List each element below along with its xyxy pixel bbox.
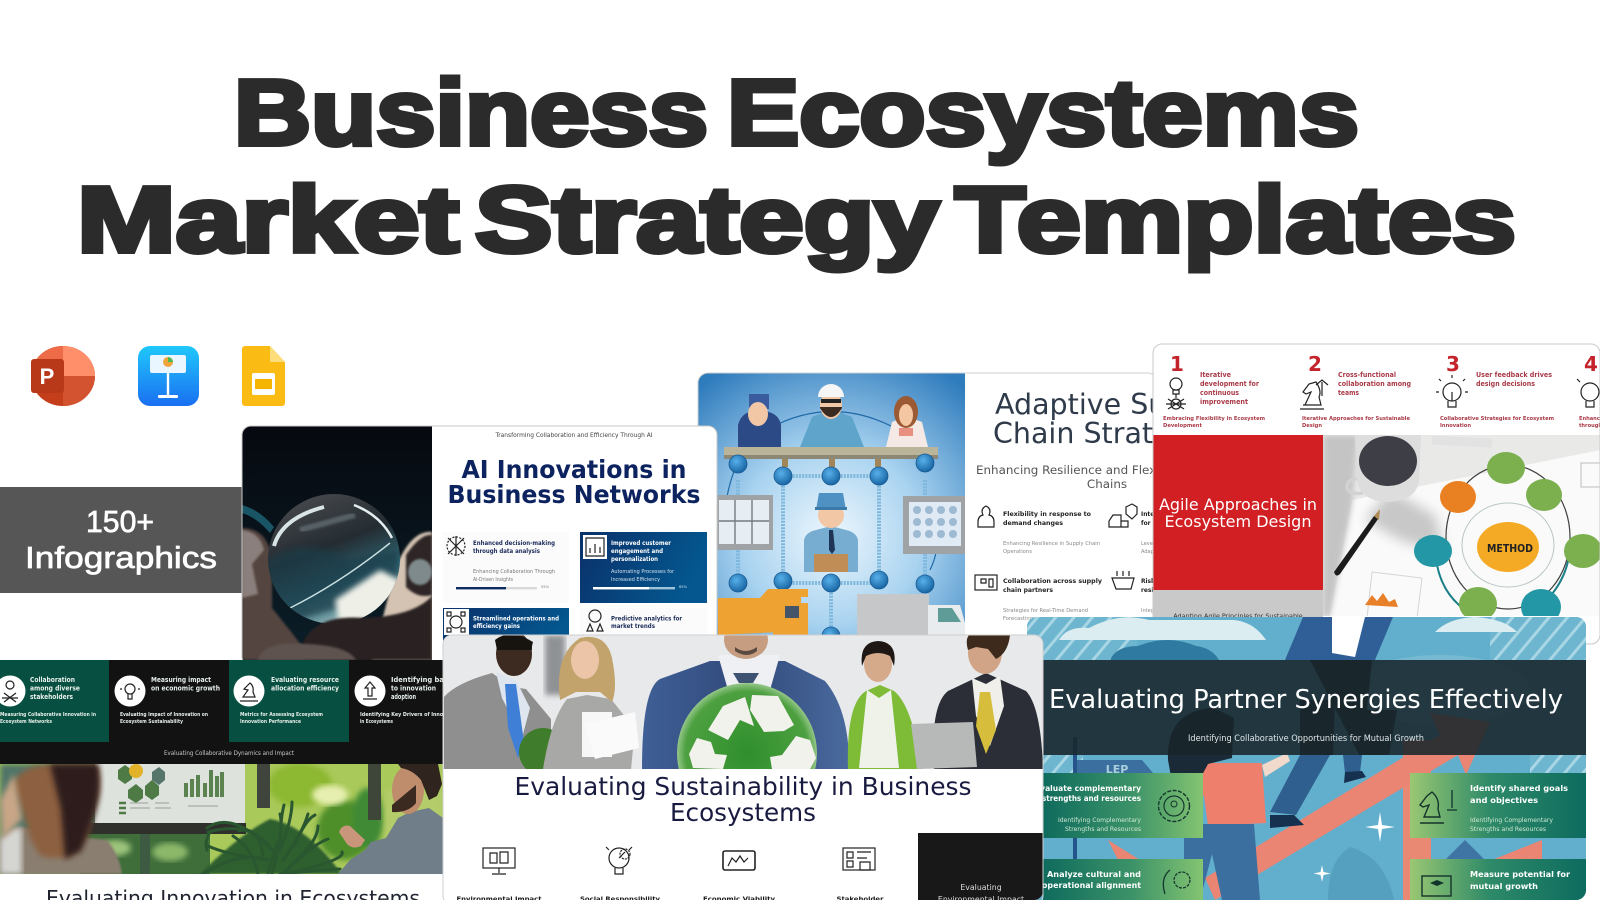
title block: Agile Approaches in Ecosystem Design: Agile Approaches in [1159, 495, 1317, 514]
heading: AI Innovations in Business Networks: AI Innovations in [462, 455, 686, 484]
numbered points row: 3 [1446, 352, 1460, 376]
card: analyze cultural alignment: Analyze cultural and [1047, 870, 1141, 879]
panel: Evaluating Partner Synergies slide [1027, 617, 1586, 900]
title: Templates [955, 168, 1516, 272]
icon: environmental impact monitor [483, 848, 515, 874]
top band with four metric columns [0, 660, 465, 764]
image: business team holding recycling globe [444, 636, 1042, 769]
top band with four metric columns: allocation efficiency [271, 684, 340, 692]
card: identify shared goals [1410, 773, 1586, 838]
icon: PowerPoint [31, 346, 95, 406]
heading: Adaptive Supply Chain Strategies: Chain Strategies [993, 417, 1229, 450]
numbered points row: Development [1163, 423, 1203, 429]
numbered points row: Iterative Approaches for Sustainable [1302, 416, 1411, 422]
card: identify shared goals: Identifying Complementary [1470, 817, 1553, 824]
numbered points row: Embracing Flexibility in Ecosystem [1163, 416, 1265, 422]
heading: Adaptive Supply Chain Strategies [994, 392, 1152, 444]
numbered points row: improvement [1200, 398, 1249, 406]
title block: Agile Approaches in Ecosystem Design [1154, 435, 1323, 617]
subtitle: Enhancing Resilience [977, 465, 1152, 488]
numbered points row: collaboration among [1338, 380, 1411, 388]
top band with four metric columns: among diverse [30, 684, 80, 692]
icon: Google Slides [242, 346, 285, 406]
card: predictive analytics [586, 609, 682, 632]
labels: four sustainability pillars [457, 896, 884, 900]
numbered points row: Design [1302, 423, 1322, 429]
title block: Agile Approaches in Ecosystem Design: Ecosystem Design [1164, 512, 1312, 531]
image: glass sphere in hands [242, 426, 432, 660]
numbered points row: 1 [1170, 352, 1184, 376]
card: enhanced decision-making: through data analysis [473, 549, 540, 555]
card: streamlined operations: Streamlined operations and [473, 616, 559, 622]
card: enhanced decision-making: AI-Driven Insights [473, 577, 513, 583]
band: title [1043, 660, 1586, 755]
card: identify shared goals: Strengths and Resources [1470, 826, 1546, 833]
panel: AI Innovations in Business Networks slide [242, 426, 717, 666]
card: improved customer engagement [580, 532, 707, 603]
card: evaluate complementary strengths: Evaluate complementary [1035, 784, 1141, 793]
items: supply chain strategy points: chain partners [1003, 588, 1054, 594]
items: supply chain strategy points: Risk [1141, 579, 1156, 585]
top band with four metric columns: to innovation [391, 684, 436, 692]
numbered points row: development for [1200, 380, 1260, 388]
card: measure potential for mutual growth: mutual growth [1470, 881, 1538, 891]
image: method diagram on desk: METHOD [1487, 542, 1533, 555]
top band with four metric columns: Measuring impact [151, 676, 212, 684]
numbered points row: teams [1338, 389, 1359, 397]
heading: AI Innovations in Business Networks: Business Networks [448, 480, 700, 509]
subtitle: Enhancing Resilience: Chains [1087, 477, 1127, 491]
card: identify shared goals: Identify shared goals [1470, 783, 1568, 793]
items: supply chain strategy points [974, 503, 1152, 620]
card: identify shared goals: and objectives [1470, 795, 1538, 805]
card: analyze cultural alignment [1042, 859, 1203, 900]
top band with four metric columns: Ecosystem Sustainability [120, 719, 184, 725]
image: partners climbing arrow illustration [1027, 617, 1586, 900]
card: evaluate complementary strengths: Identifying Complementary [1058, 817, 1141, 824]
title: Strategy [475, 168, 939, 272]
numbered points row: Cross-functional [1338, 371, 1396, 379]
slide subtitle: Transforming Collaboration and Efficiency Through AI [495, 431, 653, 439]
items: supply chain strategy points: Collaboration across supply [1003, 579, 1102, 585]
card: measure potential for mutual growth [1410, 859, 1586, 900]
card: predictive analytics: Predictive analytics for [611, 616, 682, 622]
title: Market [77, 168, 459, 272]
top band with four metric columns: Identifying Key Drivers of Innovation [360, 712, 461, 718]
numbered points row [1163, 352, 1600, 429]
title: Ecosystems [727, 60, 1359, 164]
icon: social responsibility bulb and gears [606, 847, 632, 874]
image: supply chain workers illustration [698, 373, 965, 645]
items: supply chain strategy points: Forecasting [1003, 616, 1033, 622]
numbered points row: 4 [1584, 352, 1598, 376]
card: enhanced decision-making [446, 536, 555, 590]
icon: economic viability board [723, 851, 755, 870]
card: analyze cultural alignment: operational alignment [1042, 881, 1141, 890]
card: evaluate complementary strengths: Strengths and Resources [1065, 826, 1141, 833]
heading: Evaluating Sustainability in Business Ecosystems: Ecosystems [670, 798, 816, 827]
image: method diagram on desk [1323, 435, 1600, 627]
heading: Evaluating Partner Synergies Effectively: Evaluating Partner Synergies Effectively [1049, 685, 1563, 715]
numbered points row: continuous [1200, 389, 1239, 397]
icon: PowerPoint: P [40, 364, 54, 389]
card: predictive analytics: market trends [611, 624, 655, 630]
badge: 150+ Infographics [0, 487, 242, 593]
items: supply chain strategy points: Adaptive [1141, 549, 1163, 555]
top band with four metric columns: on economic growth [151, 684, 220, 692]
heading: Adaptive Supply Chain Strategies: Adaptive Supply [995, 388, 1227, 421]
icon: stakeholder dashboard [843, 848, 875, 870]
card: improved customer engagement: Improved customer [611, 541, 671, 547]
top band with four metric columns: Evaluating Impact of Innovation on [120, 712, 209, 718]
top band with four metric columns: in Ecosystems [360, 719, 393, 725]
numbered points row: 2 [1308, 352, 1322, 376]
panel: Adaptive Supply Chain Strategies slide [698, 374, 1152, 634]
title block: Agile Approaches in Ecosystem Design: Adapting Agile Principles for Sustainable [1173, 612, 1303, 620]
items: supply chain strategy points: Enhancing Resilience in Supply Chain [1003, 541, 1100, 547]
card: streamlined operations [443, 608, 569, 641]
badge: 150+ Infographics: 150+ [86, 504, 154, 539]
top band with four metric columns: Measuring Collaborative Innovation in [0, 712, 97, 718]
title: Business [234, 60, 708, 164]
card: evaluate complementary strengths: strengths and resources [1042, 794, 1141, 803]
card: enhanced decision-making: Enhanced decision-making [473, 541, 555, 547]
image: colleagues reviewing green data [0, 763, 443, 878]
items: supply chain strategy points: Flexibility in response to [1003, 512, 1091, 518]
card: improved customer engagement: Automating Processes for [611, 569, 675, 575]
items: supply chain strategy points: Strategies for Real-Time Demand [1003, 608, 1088, 614]
top band with four metric columns: Innovation Performance [240, 719, 302, 725]
card: enhanced decision-making: 55% [541, 585, 550, 589]
top band with four metric columns: stakeholders [30, 693, 73, 701]
numbered points row: Collaborative Strategies for Ecosystem [1440, 416, 1554, 422]
card: improved customer engagement: 65% [679, 585, 688, 589]
heading: AI Innovations in Business Networks [450, 459, 700, 504]
heading: Evaluating Sustainability in Business Ecosystems: Evaluating Sustainability in Business [514, 772, 972, 801]
items: supply chain strategy points: Operations [1003, 549, 1032, 555]
top band with four metric columns: Ecosystem Networks [0, 719, 52, 725]
heading: Evaluating Sustainability in Business Ecosystems [514, 772, 972, 827]
title [77, 60, 1516, 272]
card: measure potential for mutual growth: Measure potential for [1470, 869, 1571, 879]
top band with four metric columns: Collaboration [30, 676, 75, 684]
numbered points row: Iterative [1200, 371, 1231, 379]
badge: 150+ Infographics: Infographics [25, 540, 217, 575]
card: streamlined operations: efficiency gains [473, 624, 520, 630]
numbered points row: Innovation [1440, 423, 1471, 429]
items: supply chain strategy points: Leveraging [1141, 541, 1169, 547]
top band with four metric columns: Identifying barriers [391, 676, 465, 684]
card: improved customer engagement: engagement and [611, 549, 663, 555]
icon: Keynote [138, 346, 199, 406]
callout: evaluating environmental impact: Evaluating [960, 883, 1002, 892]
panel: Agile Approaches in Ecosystem Design slide [1154, 356, 1600, 617]
image: partners climbing arrow illustration: LEP [1106, 763, 1128, 776]
top band with four metric columns: Evaluating Collaborative Dynamics and Impact [164, 751, 295, 757]
items: supply chain strategy points: demand changes [1003, 521, 1064, 527]
items: supply chain strategy points: Integrated [1141, 512, 1176, 518]
items: supply chain strategy points: Integrating [1141, 608, 1169, 614]
numbered points row: User feedback drives [1476, 371, 1552, 379]
top band with four metric columns: Evaluating resource [271, 676, 339, 684]
items: supply chain strategy points: for visibility [1141, 521, 1181, 527]
card: improved customer engagement: Increased Efficiency [611, 577, 660, 583]
panel: Evaluating Innovation in Ecosystems slide [0, 660, 465, 900]
card: improved customer engagement: personalization [611, 557, 658, 563]
card: enhanced decision-making: Enhancing Collaboration Through [473, 569, 555, 575]
numbered points row: design decisions [1476, 380, 1535, 388]
subheading: Identifying Collaborative Opportunities: Identifying Collaborative Opportunities for Mutual Growth [1188, 734, 1424, 744]
top band with four metric columns: Metrics for Assessing Ecosystem [240, 712, 323, 718]
card: evaluate complementary strengths [1035, 773, 1203, 838]
top band with four metric columns: adoption [391, 693, 416, 701]
panel: Evaluating Sustainability in Business Ecosystems slide [443, 621, 1043, 900]
callout: evaluating environmental impact [918, 833, 1043, 900]
items: supply chain strategy points: resilience [1141, 588, 1173, 594]
subtitle: Enhancing Resilience: Enhancing Resilience and Flexibility in Supply [976, 463, 1248, 477]
